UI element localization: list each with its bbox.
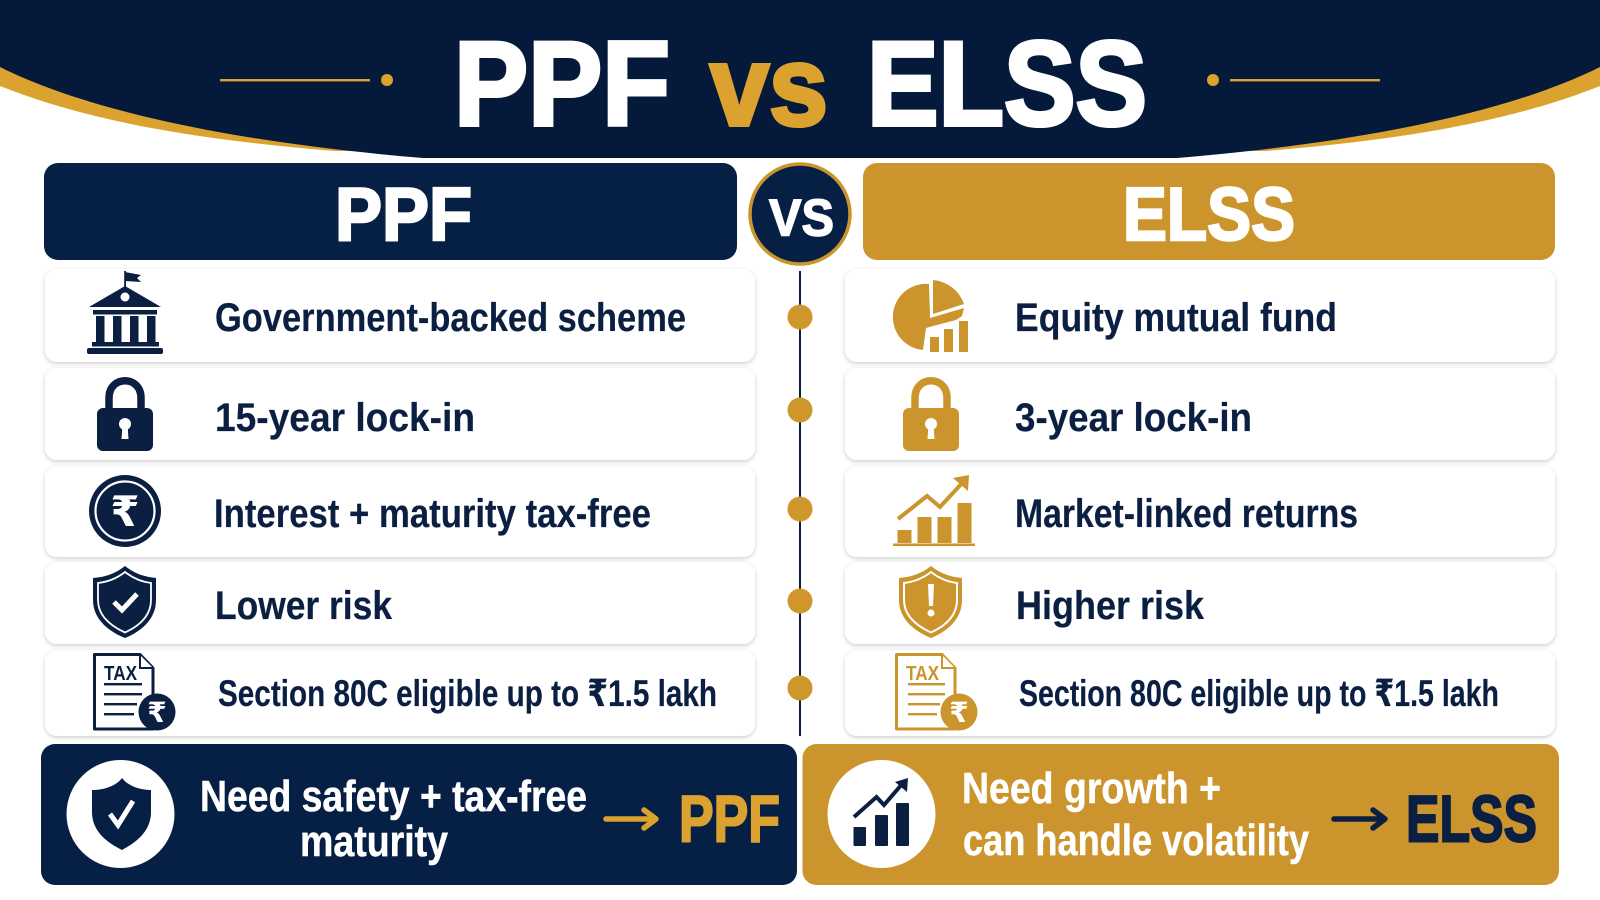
decoration: left line and dot bbox=[220, 74, 393, 86]
icon: lock gold bbox=[903, 381, 959, 451]
text: 3-year: 3-year lock-in bbox=[1015, 396, 1252, 440]
icon: shield check bbox=[93, 566, 156, 638]
icon: rupee coin: ₹ bbox=[110, 488, 140, 535]
column heading: PPF bbox=[44, 163, 737, 260]
icon: government bank bbox=[87, 271, 163, 354]
text: need growth bbox=[962, 765, 1309, 865]
header banner bbox=[0, 0, 1600, 158]
column heading: ELSS bbox=[863, 163, 1555, 260]
row cards: ELSS bbox=[845, 269, 1555, 736]
text: lower risk: Lower risk bbox=[215, 584, 392, 628]
icon: rising chart bbox=[893, 475, 975, 546]
text: need safety bbox=[200, 773, 587, 866]
icon: tax document: ₹ bbox=[147, 697, 167, 728]
arrow bbox=[1334, 810, 1385, 828]
text: higher risk: Higher risk bbox=[1016, 584, 1204, 628]
text: need growth: Need growth + bbox=[962, 765, 1221, 813]
column heading: PPF: PPF bbox=[335, 172, 472, 256]
title: vs bbox=[710, 23, 828, 149]
text: 15-year: 15-year lock-in bbox=[215, 396, 475, 440]
icon: tax document gold bbox=[896, 654, 978, 730]
column heading: ELSS: ELSS bbox=[1123, 172, 1295, 256]
vs badge: VS bbox=[769, 190, 834, 248]
text: government-backed: Government-backed scheme bbox=[215, 296, 686, 340]
label: ELSS: ELSS bbox=[1406, 782, 1537, 856]
timeline spine bbox=[788, 271, 812, 736]
text: equity: Equity mutual fund bbox=[1015, 296, 1337, 340]
title: PPF bbox=[454, 17, 670, 151]
text: section 80C PPF: Section 80C eligible up to ₹1.5 lakh bbox=[218, 672, 717, 714]
label: PPF: PPF bbox=[679, 782, 780, 856]
icon: white circle chart bbox=[828, 760, 936, 868]
text: need growth: can handle volatility bbox=[963, 817, 1309, 865]
icon: pie and bars bbox=[893, 280, 968, 352]
text: interest: Interest + maturity tax-free bbox=[214, 492, 651, 536]
callout: ELSS verdict bbox=[802, 744, 1559, 885]
title: ELSS bbox=[867, 17, 1147, 151]
icon: shield warning bbox=[899, 566, 962, 638]
panel: PPF rows bbox=[45, 269, 755, 736]
icon: white circle shield bbox=[66, 760, 174, 868]
decoration: right line and dot bbox=[1207, 74, 1380, 86]
icon: tax document gold: ₹ bbox=[949, 697, 969, 728]
icon: tax document: TAX bbox=[104, 663, 138, 685]
title bbox=[454, 17, 1147, 151]
text: need safety: Need safety + tax-free bbox=[200, 773, 587, 821]
icon: tax document gold: TAX bbox=[906, 663, 940, 685]
callout: PPF verdict bbox=[41, 744, 797, 885]
icon: lock bbox=[97, 381, 153, 451]
arrow bbox=[606, 810, 656, 828]
row cards: PPF bbox=[45, 269, 755, 736]
vs badge bbox=[750, 164, 850, 264]
panel: ELSS rows bbox=[845, 269, 1555, 736]
text: market-linked: Market-linked returns bbox=[1015, 492, 1358, 536]
text: need safety: maturity bbox=[300, 818, 448, 866]
icon: tax document bbox=[94, 654, 176, 730]
icon: rupee coin bbox=[89, 475, 161, 547]
